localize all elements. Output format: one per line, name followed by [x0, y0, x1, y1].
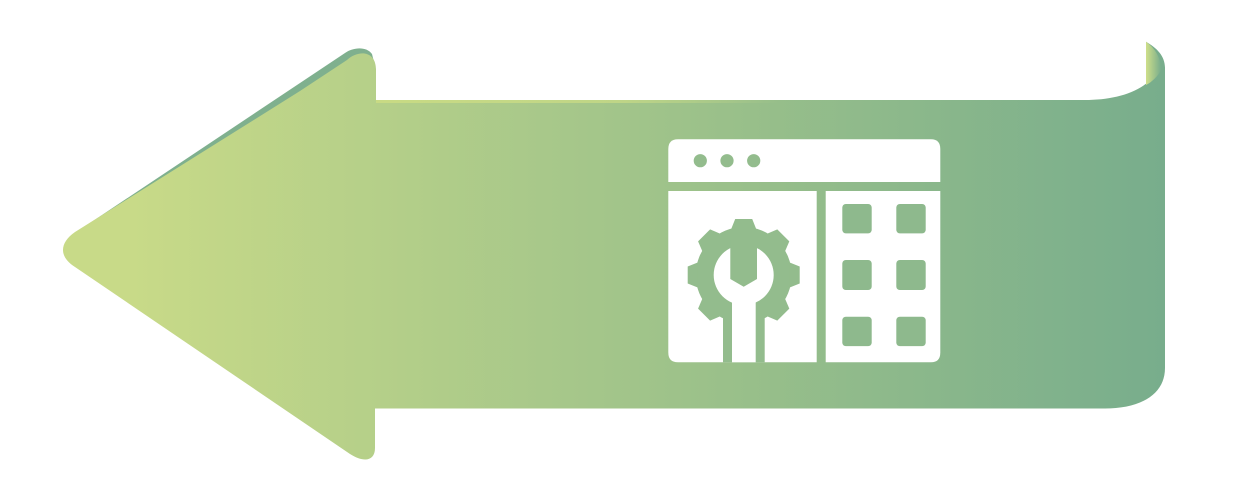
- arrow ribbon graphic: [63, 42, 1165, 460]
- left settings panel: [668, 191, 817, 362]
- wrench jaw slot: [730, 240, 757, 287]
- gear: [688, 219, 800, 323]
- arrow head shadow edge: [78, 48, 376, 240]
- wrench head: [714, 245, 774, 305]
- icon: application window with gear, wrench and grid: [668, 139, 940, 362]
- ribbon back fold: [1100, 42, 1165, 110]
- right grid panel: [826, 191, 940, 362]
- top band highlight strip: [376, 100, 780, 103]
- grid tiles: [842, 204, 926, 346]
- inner fold highlight: [1146, 42, 1161, 85]
- wrench handle: [732, 297, 756, 362]
- arrow body: [63, 53, 1165, 460]
- wrench handle outline: [723, 316, 765, 362]
- window title bar: [668, 139, 940, 182]
- gear and wrench: [688, 219, 800, 362]
- window control dots: [694, 154, 760, 167]
